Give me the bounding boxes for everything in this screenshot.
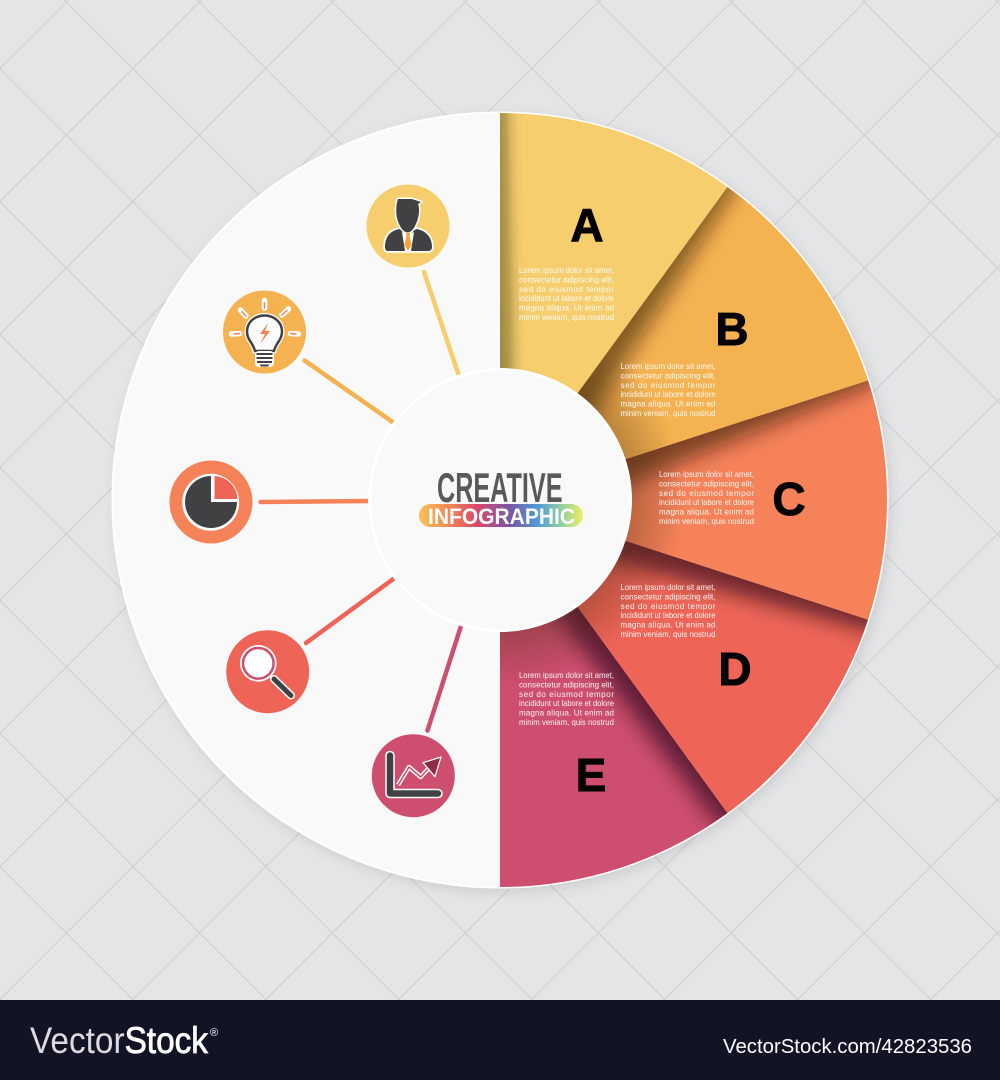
text block B: consectetur adipiscing elit, bbox=[620, 370, 716, 380]
circular diagram bbox=[112, 100, 890, 888]
hub shade on segments bbox=[500, 366, 678, 674]
text block B bbox=[620, 361, 716, 418]
text block D: sed do eiusmod tempor bbox=[620, 602, 716, 611]
text block D: consectetur adipiscing elit, bbox=[620, 591, 716, 601]
text block A: minim veniam, quis nostrud bbox=[519, 312, 614, 322]
text block D bbox=[620, 582, 716, 639]
footer logo: VectorStock bbox=[30, 1020, 208, 1061]
disc base bbox=[112, 112, 888, 888]
title pill: infographic: INFOGRAPHIC bbox=[428, 504, 575, 529]
text block D: minim veniam, quis nostrud bbox=[620, 629, 716, 639]
text block C: magna aliqua. Ut enim ad bbox=[659, 508, 754, 517]
text block E: consectetur adipiscing elit, bbox=[519, 679, 614, 689]
text block A: Lorem ipsum dolor sit amet, bbox=[519, 265, 614, 275]
connector lines bbox=[260, 272, 461, 730]
text block E bbox=[519, 670, 614, 727]
segment E bbox=[500, 607, 728, 887]
footer bar bbox=[0, 1000, 1000, 1080]
segment D bbox=[578, 541, 868, 813]
icon: growth chart bbox=[372, 734, 455, 817]
text block C: consectetur adipiscing elit, bbox=[659, 478, 754, 488]
text block B: sed do eiusmod tempor bbox=[620, 381, 716, 390]
icon: light bulb bbox=[223, 290, 306, 374]
icon: magnifier bbox=[226, 630, 309, 713]
left panel bbox=[114, 114, 500, 886]
text block E: sed do eiusmod tempor bbox=[519, 690, 614, 699]
text block B: Lorem ipsum dolor sit amet, bbox=[620, 361, 716, 371]
footer registered mark: ® bbox=[210, 1027, 218, 1039]
text block B: minim veniam, quis nostrud bbox=[620, 408, 716, 418]
text block A: magna aliqua. Ut enim ad bbox=[519, 304, 614, 313]
text block C: Lorem ipsum dolor sit amet, bbox=[659, 469, 754, 479]
icon: businessman bbox=[366, 184, 450, 268]
letter E: E bbox=[576, 749, 606, 801]
text block D: magna aliqua. Ut enim ad bbox=[620, 621, 716, 630]
text block A: sed do eiusmod tempor bbox=[519, 285, 614, 294]
footer url: VectorStock.com/42823536 bbox=[723, 1035, 972, 1058]
text block E: minim veniam, quis nostrud bbox=[519, 717, 614, 727]
letter D: D bbox=[718, 643, 752, 695]
text block C bbox=[659, 469, 754, 526]
text block B: magna aliqua. Ut enim ad bbox=[620, 400, 716, 409]
segment C bbox=[626, 380, 888, 620]
icon: pie chart bbox=[170, 460, 252, 544]
text block E: magna aliqua. Ut enim ad bbox=[519, 709, 614, 718]
text block E: incididunt ut labore et dolore bbox=[519, 698, 614, 708]
text block A bbox=[519, 265, 614, 322]
text block C: incididunt ut labore et dolore bbox=[659, 497, 754, 507]
segment B bbox=[578, 187, 868, 459]
text block B: incididunt ut labore et dolore bbox=[620, 389, 716, 399]
text block C: minim veniam, quis nostrud bbox=[659, 516, 754, 526]
text block C: sed do eiusmod tempor bbox=[659, 489, 754, 498]
text block D: incididunt ut labore et dolore bbox=[620, 610, 716, 620]
segment A bbox=[500, 113, 728, 393]
letter A: A bbox=[570, 199, 604, 251]
letter C: C bbox=[772, 473, 806, 525]
text block D: Lorem ipsum dolor sit amet, bbox=[620, 582, 716, 592]
center hub bbox=[370, 370, 630, 630]
letter B: B bbox=[715, 303, 749, 355]
text block E: Lorem ipsum dolor sit amet, bbox=[519, 670, 614, 680]
text block A: consectetur adipiscing elit, bbox=[519, 274, 614, 284]
text block A: incididunt ut labore et dolore bbox=[519, 293, 614, 303]
title: creative: CREATIVE bbox=[437, 464, 562, 511]
